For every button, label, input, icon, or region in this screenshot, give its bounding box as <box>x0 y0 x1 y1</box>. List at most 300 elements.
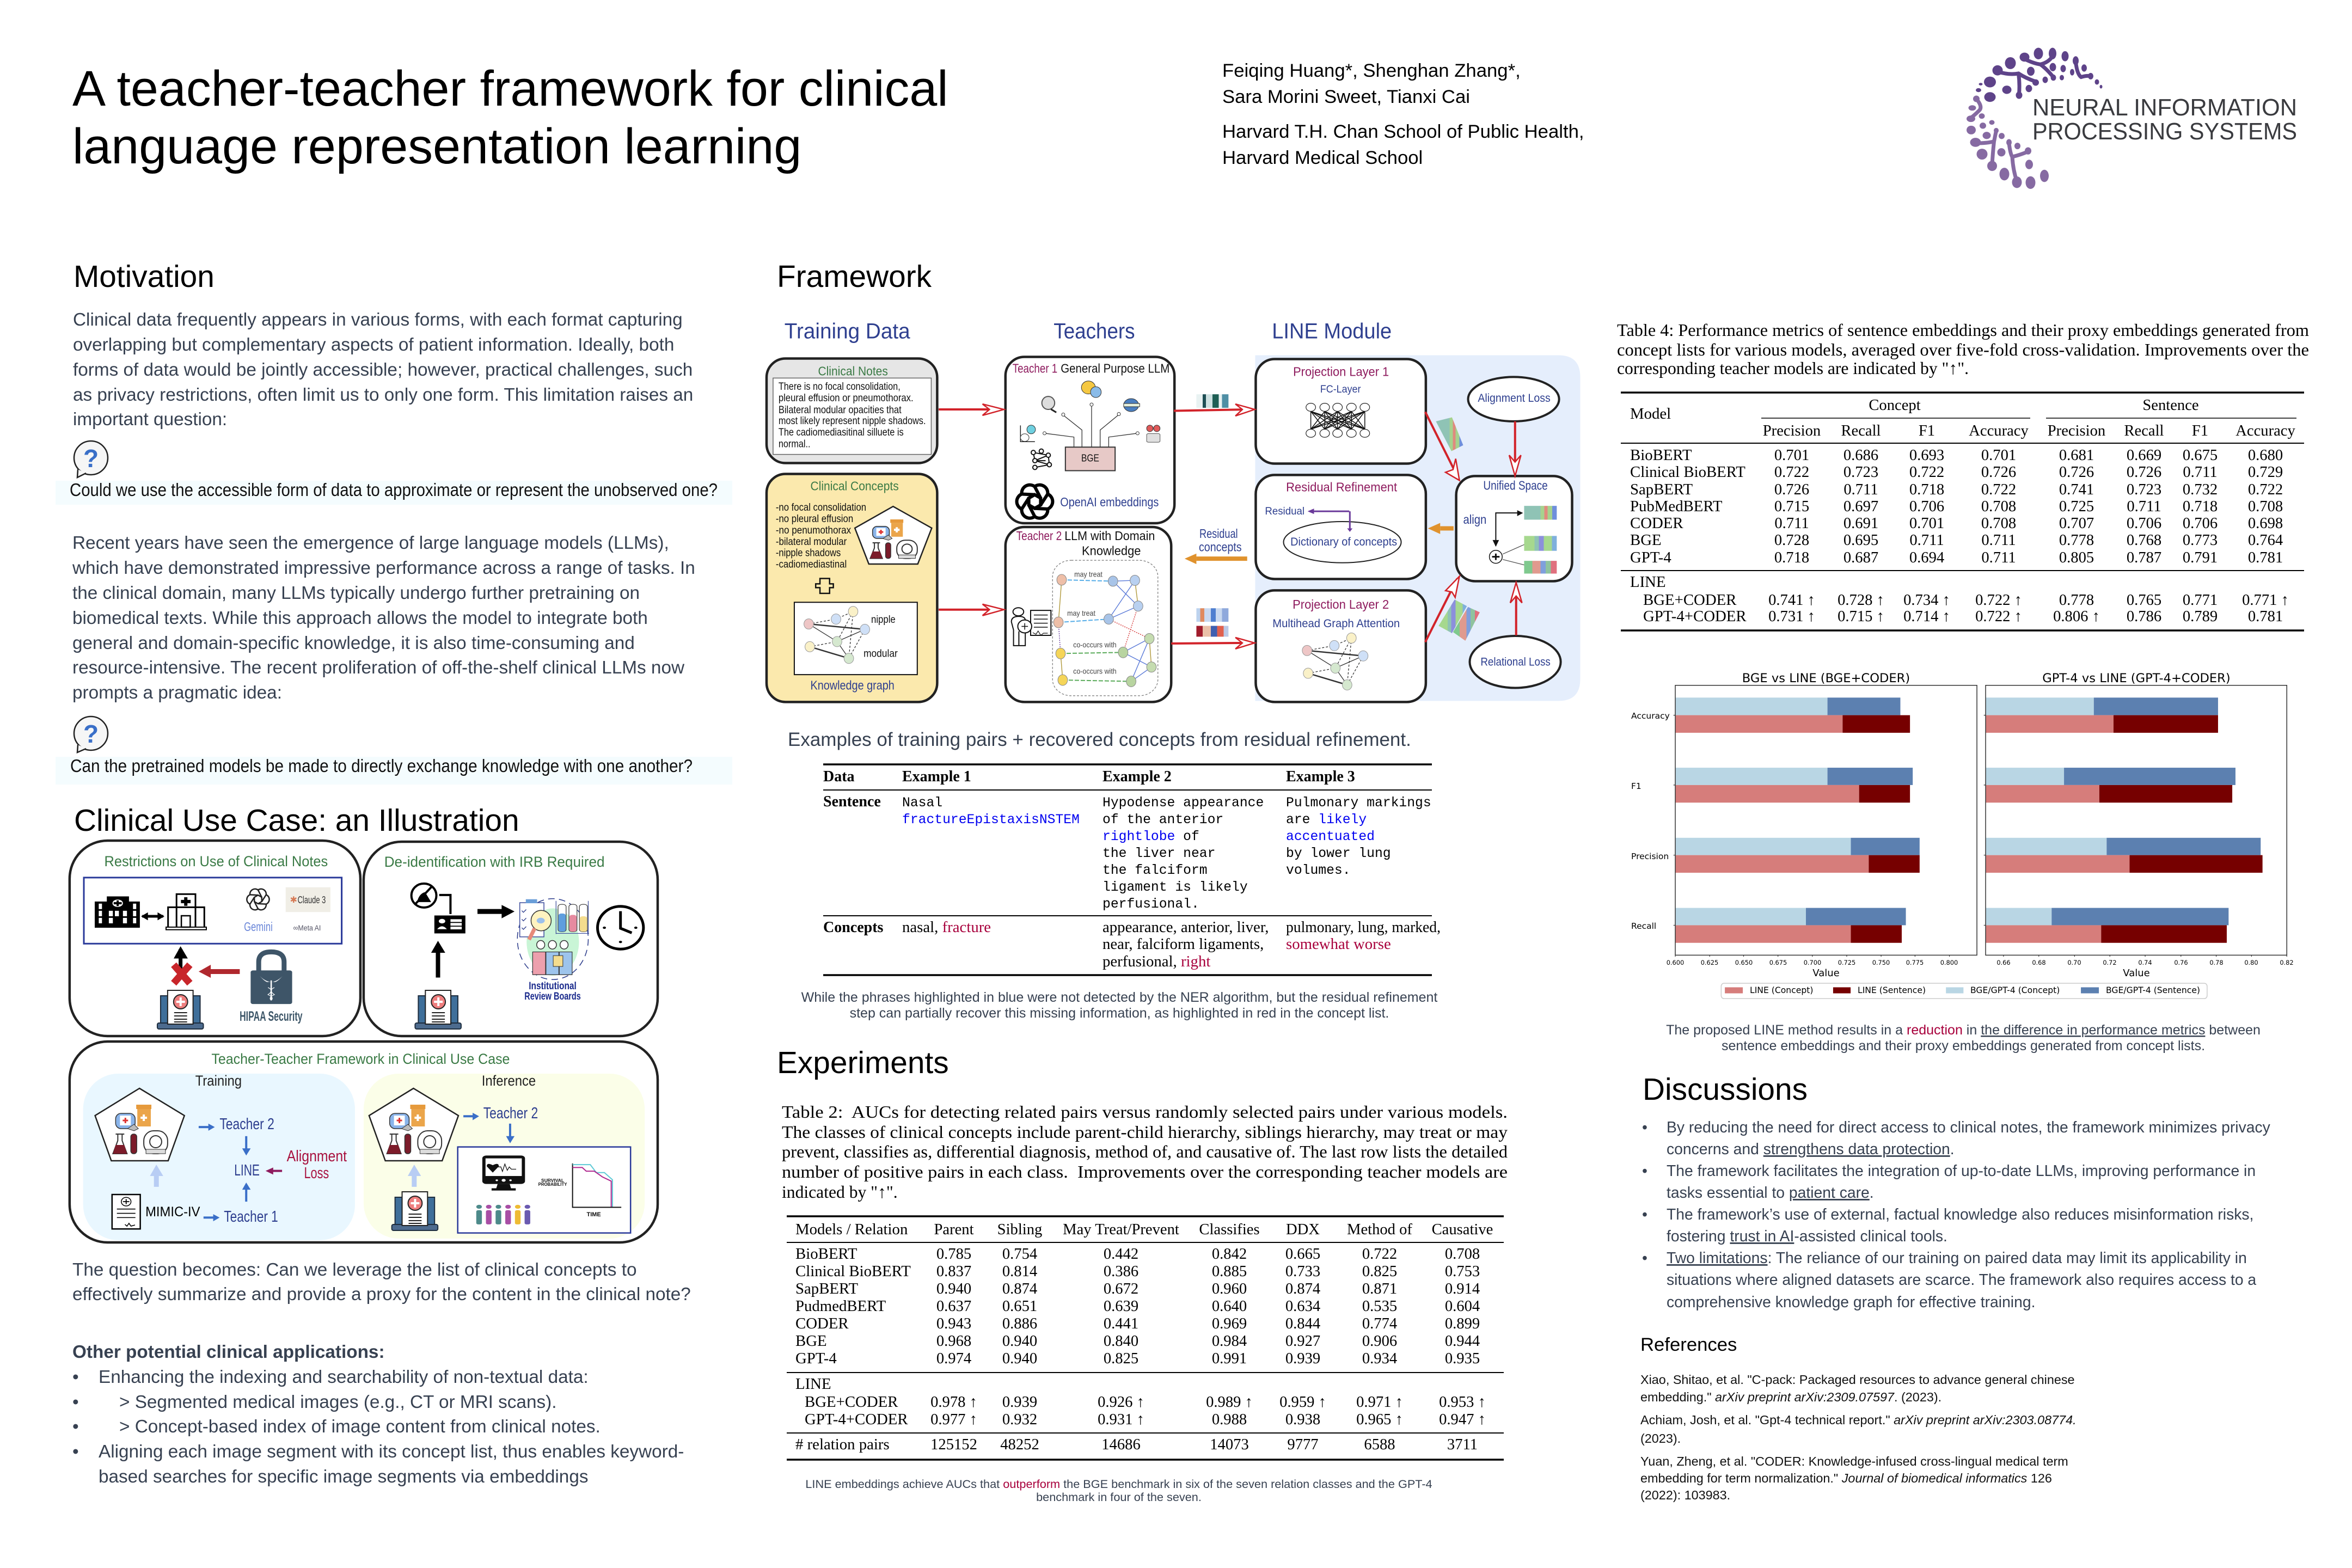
table: performance metrics: Model <box>1630 405 1671 422</box>
panel: projection layer 1: FC-Layer <box>1320 383 1361 395</box>
table: AUCs by relation: 0.825 <box>1104 1350 1138 1367</box>
row: concepts <box>823 918 1441 970</box>
panel: clinical notes: The cadiomediasitinal silluete is <box>779 426 904 438</box>
icon: question bubble 1 <box>74 441 108 477</box>
panel: teacher 2: LLM with Domain <box>1064 529 1155 543</box>
table: performance metrics: BGE+CODER <box>1643 591 1737 609</box>
title <box>72 61 948 174</box>
text block: references: Achiam, Josh, et al. "Gpt-4 technical report." arXiv preprint arXiv:2303.08774. <box>1640 1413 2077 1427</box>
panel: de-identification with IRB: De-identification with IRB Required <box>384 854 605 870</box>
table: performance metrics: F1 <box>1919 422 1935 439</box>
callout: second question <box>56 756 732 785</box>
text block: question becomes: effectively summarize and provide a proxy for the content in the clinical note? <box>72 1284 691 1304</box>
bar chart: GPT-4 vs LINE: 0.80 <box>2244 959 2258 966</box>
label: residual concepts <box>1199 526 1242 554</box>
row: sentence: ligament is likely <box>1102 880 1248 895</box>
table: performance metrics: 0.708 <box>1981 498 2016 515</box>
table: AUCs by relation: 14686 <box>1101 1436 1141 1453</box>
table: AUCs by relation: 0.871 <box>1362 1281 1397 1297</box>
text block: discussion bullets: comprehensive knowledge graph for effective training. <box>1667 1293 2035 1310</box>
heading: References: References <box>1640 1334 1737 1355</box>
row: concepts: nasal, fracture <box>902 918 991 936</box>
bar chart: GPT-4 vs LINE: 0.66 <box>1996 959 2011 966</box>
panel: clinical notes: Bilateral modular opacities that <box>779 404 902 416</box>
bar chart: BGE vs LINE: Value <box>1812 967 1840 979</box>
caption: chart finding: The proposed LINE method results in a reduction in the difference in performance metrics between <box>1666 1022 2261 1038</box>
text: relational loss: Relational Loss <box>1480 656 1551 669</box>
sub-panel: training <box>83 1073 355 1240</box>
table: AUCs by relation: 0.665 <box>1285 1246 1320 1263</box>
text block: references <box>1640 1373 2077 1502</box>
table: AUCs by relation: 48252 <box>1000 1436 1039 1453</box>
table: AUCs by relation: 0.640 <box>1212 1298 1247 1315</box>
table: performance metrics: 0.731 ↑ <box>1768 608 1815 625</box>
panel: restrictions on clinical notes: HIPAA Security <box>240 1009 303 1024</box>
panel: projection layer 1 <box>1255 359 1426 464</box>
text block: other potential clinical applications <box>72 1342 684 1487</box>
caption: residual refinement note: step can partially recover this missing information, as highlighted in red in the concept list. <box>850 1006 1389 1021</box>
table: AUCs by relation: 0.940 <box>936 1281 971 1297</box>
text block: discussion bullets: • <box>1642 1205 1647 1223</box>
table: performance metrics: Accuracy <box>2235 422 2295 439</box>
table: performance metrics: 0.711 <box>2127 498 2161 515</box>
table: performance metrics: 0.701 <box>1909 515 1944 532</box>
text block: other potential clinical applications: • <box>72 1367 79 1387</box>
heading: Discussions: Discussions <box>1643 1073 1808 1107</box>
table: AUCs by relation: 0.947 ↑ <box>1439 1411 1486 1428</box>
table: AUCs by relation: 125152 <box>930 1436 977 1453</box>
table: performance metrics: 0.695 <box>1843 532 1878 549</box>
table: AUCs by relation: 0.899 <box>1445 1315 1480 1332</box>
table: AUCs by relation: 0.874 <box>1285 1281 1320 1297</box>
panel: teacher-teacher framework in clinical use case: Teacher-Teacher Framework in Clinical Use Case <box>211 1051 510 1067</box>
table: AUCs by relation: 0.634 <box>1285 1298 1320 1315</box>
row: sentence: the falciform <box>1102 863 1208 878</box>
table: performance metrics: 0.681 <box>2059 447 2094 464</box>
panel: teacher 1 <box>1006 357 1174 523</box>
table: AUCs by relation: 0.974 <box>936 1350 971 1367</box>
logo: NeurIPS: PROCESSING SYSTEMS <box>2032 118 2297 145</box>
legend: BGE/GPT-4 (Concept) <box>1970 985 2060 995</box>
panel: restrictions on clinical notes: Gemini <box>244 920 273 934</box>
text block: LLM background: Recent years have seen the emergence of large language models (LLMs), <box>72 533 669 553</box>
bar chart: BGE vs LINE <box>1631 671 1977 979</box>
table: performance metrics: 0.806 ↑ <box>2053 608 2100 625</box>
table: performance metrics: 0.726 <box>2127 464 2161 481</box>
table: AUCs by relation: 0.989 ↑ <box>1206 1394 1253 1411</box>
table: AUCs by relation: Classifies <box>1199 1221 1260 1238</box>
text block: references: embedding for term normalization." Journal of biomedical informatics 126 <box>1640 1471 2052 1485</box>
table: AUCs by relation: Models / Relation <box>795 1221 908 1238</box>
panel: teacher 2: may treat <box>1067 609 1095 617</box>
text block: question becomes: The question becomes: Can we leverage the list of clinical concepts to <box>72 1260 636 1280</box>
table: AUCs by relation: Sibling <box>997 1221 1042 1238</box>
table: performance metrics: Precision <box>1763 422 1821 439</box>
icon: OpenAI logo <box>1017 485 1052 518</box>
text: table 2 caption: number of positive pairs in each class. Improvements over the corresponding teacher models are <box>782 1162 1508 1181</box>
table: AUCs by relation: 0.785 <box>936 1246 971 1263</box>
table: performance metrics: 0.714 ↑ <box>1903 608 1950 625</box>
table: AUCs by relation: 0.931 ↑ <box>1098 1411 1144 1428</box>
table: performance metrics: 0.680 <box>2248 447 2283 464</box>
table: AUCs by relation: 0.639 <box>1104 1298 1138 1315</box>
sub-panel: training: Training <box>195 1073 242 1089</box>
text block: discussion bullets: • <box>1642 1249 1647 1266</box>
legend: LINE (Concept) <box>1750 985 1813 995</box>
bar chart: BGE vs LINE: 0.650 <box>1735 959 1753 966</box>
bar chart: GPT-4 vs LINE: 0.78 <box>2209 959 2224 966</box>
bar chart: GPT-4 vs LINE: 0.72 <box>2103 959 2117 966</box>
text: table 2 caption: prevent, classifies as, differential diagnosis, method of, and causative of. The last row lists the detailed <box>782 1142 1508 1161</box>
row: concepts: pulmonary, lung, marked, <box>1286 918 1441 936</box>
table: AUCs by relation: 6588 <box>1364 1436 1395 1453</box>
text block: motivation intro: overlapping but complementary aspects of patient information. Ideally, both <box>73 335 674 355</box>
table: performance metrics: 0.734 ↑ <box>1903 592 1950 609</box>
text block: other potential clinical applications: Enhancing the indexing and searchability of non-textual data: <box>99 1367 589 1387</box>
table: AUCs by relation: BioBERT <box>795 1245 857 1263</box>
table: AUCs by relation: 0.535 <box>1362 1298 1397 1315</box>
table: performance metrics: 0.791 <box>2183 549 2218 566</box>
title: language representation learning <box>72 119 801 174</box>
panel: de-identification with IRB: Institutional <box>529 981 577 992</box>
table: AUCs by relation: 0.938 <box>1285 1411 1320 1428</box>
panel: clinical notes: Clinical Notes <box>818 364 888 378</box>
text block: other potential clinical applications: • <box>72 1442 79 1462</box>
bar chart: BGE vs LINE: Accuracy <box>1631 711 1670 721</box>
table: AUCs by relation: 0.874 <box>1002 1281 1037 1297</box>
legend <box>1721 983 2207 999</box>
table: AUCs by relation: 0.953 ↑ <box>1439 1394 1486 1411</box>
table: AUCs by relation: 0.927 <box>1285 1333 1320 1350</box>
table: performance metrics: 0.686 <box>1843 447 1878 464</box>
table: performance metrics: 0.726 <box>2059 464 2094 481</box>
text block: LLM background: general and domain-specific knowledge, it is also time-consuming and <box>72 633 635 653</box>
chart: framework diagram: Training Data <box>785 320 910 344</box>
panel: teacher 1: Teacher 1 <box>1013 361 1057 375</box>
table: AUCs by relation: CODER <box>795 1315 849 1332</box>
text block: discussion bullets: By reducing the need for direct access to clinical notes, the framework minimizes privacy <box>1667 1118 2271 1136</box>
text: examples heading: Examples of training pairs + recovered concepts from residual refinement. <box>788 729 1411 750</box>
icon: question bubble 1: ? <box>83 444 99 473</box>
table: performance metrics: Clinical BioBERT <box>1630 463 1745 481</box>
bar chart: BGE vs LINE: BGE vs LINE (BGE+CODER) <box>1742 671 1910 685</box>
table: AUCs by relation: 0.971 ↑ <box>1356 1394 1403 1411</box>
table: AUCs by relation: 0.934 <box>1362 1350 1397 1367</box>
table: performance metrics: BioBERT <box>1630 446 1692 464</box>
sub-panel: inference: Inference <box>482 1073 536 1089</box>
sub-panel: training: Alignment <box>287 1148 347 1165</box>
text: table 4 caption <box>1617 321 2309 378</box>
arrows and embedding strips <box>939 394 1522 649</box>
table: performance metrics: Sentence <box>2142 397 2199 414</box>
table: AUCs by relation: 0.637 <box>936 1298 971 1315</box>
label: residual concepts: Residual <box>1199 526 1238 541</box>
table: performance metrics: 0.711 <box>1774 515 1809 532</box>
panel: LINE module background <box>1255 356 1580 701</box>
authors and affiliations: Feiqing Huang*, Shenghan Zhang*, <box>1222 60 1521 81</box>
panel: residual refinement: Residual Refinement <box>1286 480 1398 494</box>
table: AUCs by relation: 0.914 <box>1445 1281 1480 1297</box>
table: performance metrics: 0.764 <box>2248 532 2283 549</box>
bar chart: BGE vs LINE: 0.775 <box>1906 959 1924 966</box>
table: AUCs by relation <box>787 1216 1504 1460</box>
text block: references: Xiao, Shitao, et al. "C-pack: Packaged resources to advance general chinese <box>1640 1373 2075 1387</box>
table: performance metrics: 0.771 <box>2183 592 2218 609</box>
row: sentence: the liver near <box>1102 846 1215 861</box>
sub-panel: training: LINE <box>234 1162 260 1179</box>
heading: Experiments: Experiments <box>777 1046 949 1080</box>
text block: references: Yuan, Zheng, et al. "CODER: Knowledge-infused cross-lingual medical term <box>1640 1454 2068 1468</box>
table: performance metrics: 0.711 <box>1843 481 1878 498</box>
panel: restrictions on clinical notes: ✱ <box>290 896 297 905</box>
table: performance metrics: Recall <box>1841 422 1881 439</box>
table: AUCs by relation: Clinical BioBERT <box>795 1263 911 1280</box>
table: performance metrics: 0.675 <box>2183 447 2218 464</box>
text block: discussion bullets: The framework’s use of external, factual knowledge also reduces misinformation risks, <box>1667 1205 2253 1223</box>
table: AUCs by relation: GPT-4+CODER <box>805 1411 908 1428</box>
text block: other potential clinical applications: Other potential clinical applications: <box>72 1342 385 1362</box>
table header row: Data <box>823 768 855 785</box>
panel: residual refinement <box>1255 475 1426 579</box>
table: AUCs by relation: 0.991 <box>1212 1350 1247 1367</box>
text: table 2 caption: Table 2: AUCs for detecting related pairs versus randomly selected pairs under various models. <box>782 1102 1508 1122</box>
table: performance metrics <box>1621 393 2304 630</box>
table: performance metrics: 0.728 <box>1774 532 1809 549</box>
row: sentence: rightlobe of <box>1102 829 1199 844</box>
text block: discussion bullets: The framework facilitates the integration of up-to-date LLMs, improving performance in <box>1667 1162 2256 1179</box>
row: sentence: accentuated <box>1286 829 1375 844</box>
bar chart: BGE vs LINE: 0.625 <box>1701 959 1718 966</box>
row: sentence <box>823 793 1431 912</box>
table: AUCs by relation: 0.939 <box>1002 1394 1037 1411</box>
text: table 2 caption: indicated by "↑". <box>782 1183 898 1202</box>
panel: unified space: Unified Space <box>1483 478 1548 492</box>
text block: other potential clinical applications: based searches for specific image segments via embeddings <box>99 1467 588 1487</box>
row: sentence: Hypodense appearance <box>1102 795 1264 811</box>
row: sentence: Sentence <box>823 793 881 810</box>
table: performance metrics: Accuracy <box>1969 422 2029 439</box>
table: AUCs by relation: 0.386 <box>1104 1263 1138 1280</box>
callout: second question: Can the pretrained models be made to directly exchange knowledge with one another? <box>70 756 693 776</box>
panel: clinical concepts: -no focal consolidation <box>776 501 866 513</box>
sub-panel: inference: SURVIVAL <box>541 1178 564 1183</box>
panel: projection layer 1: Projection Layer 1 <box>1293 364 1389 378</box>
bar chart: BGE vs LINE: 0.600 <box>1667 959 1684 966</box>
table: AUCs by relation: Causative <box>1432 1221 1493 1238</box>
table: AUCs by relation: BGE+CODER <box>805 1393 898 1411</box>
table: AUCs by relation: 3711 <box>1447 1436 1478 1453</box>
text block: motivation intro: as privacy restrictions, often limit us to only one form. This limitation raises an <box>73 385 693 405</box>
chart: framework diagram <box>767 320 1580 702</box>
authors and affiliations: Harvard Medical School <box>1222 148 1423 168</box>
panel: clinical notes <box>767 359 937 463</box>
table: AUCs by relation: DDX <box>1286 1221 1320 1238</box>
table: AUCs by relation: 0.965 ↑ <box>1356 1411 1403 1428</box>
table: AUCs by relation: 0.932 <box>1002 1411 1037 1428</box>
table: AUCs by relation: 0.840 <box>1104 1333 1138 1350</box>
table: AUCs by relation: GPT-4 <box>795 1350 837 1367</box>
text: table 2 caption <box>782 1102 1508 1202</box>
panel: unified space <box>1456 476 1572 581</box>
text block: motivation intro: important question: <box>73 409 227 430</box>
row: concepts: Concepts <box>823 919 884 936</box>
legend: BGE/GPT-4 (Sentence) <box>2106 985 2200 995</box>
panel: clinical notes: most likely represent nipple shadows. <box>779 415 926 427</box>
panel: projection layer 2: Projection Layer 2 <box>1293 597 1389 611</box>
icon: OpenAI logo small <box>247 889 270 910</box>
table: AUCs by relation: 14073 <box>1210 1436 1249 1453</box>
panel: teacher 2 <box>1006 527 1171 702</box>
panel: clinical concepts: Clinical Concepts <box>811 479 899 493</box>
panel: teacher 2: may treat <box>1074 569 1102 578</box>
text block: discussion bullets: • <box>1642 1118 1647 1136</box>
table: performance metrics: 0.706 <box>2127 515 2161 532</box>
bar chart: BGE vs LINE: 0.700 <box>1804 959 1821 966</box>
table: performance metrics: 0.773 <box>2183 532 2218 549</box>
text block: discussion bullets: • <box>1642 1162 1647 1179</box>
table: performance metrics: 0.697 <box>1843 498 1878 515</box>
bar chart: GPT-4 vs LINE <box>1984 671 2294 979</box>
text block: other potential clinical applications: > Concept-based index of image content from clinical notes. <box>119 1417 601 1437</box>
row: sentence: Nasal <box>902 795 942 811</box>
bar chart: BGE vs LINE: Recall <box>1631 921 1656 931</box>
table: AUCs by relation: 0.733 <box>1285 1263 1320 1280</box>
text: table 2 caption: The classes of clinical concepts include parent-child hierarchy, siblings hierarchy, may treat or may <box>782 1123 1508 1142</box>
table: AUCs by relation: 0.753 <box>1445 1263 1480 1280</box>
text block: LLM background <box>72 533 695 703</box>
table: performance metrics: 0.708 <box>2248 498 2283 515</box>
title: A teacher-teacher framework for clinical <box>72 61 948 117</box>
panel: residual refinement: Dictionary of concepts <box>1290 536 1397 548</box>
caption: AUC finding <box>805 1477 1432 1504</box>
table: performance metrics: 0.711 <box>2183 464 2218 481</box>
table: performance metrics: 0.691 <box>1843 515 1878 532</box>
panel: restrictions on clinical notes: ∞Meta AI <box>293 923 321 932</box>
table: AUCs by relation: 0.906 <box>1362 1333 1397 1350</box>
text: relational loss <box>1469 636 1561 688</box>
table: performance metrics: 0.711 <box>1909 532 1944 549</box>
table: performance metrics: 0.771 ↑ <box>2242 592 2289 609</box>
table: performance metrics: 0.787 <box>2127 549 2161 566</box>
icon: question bubble 2 <box>74 716 108 752</box>
heading: Motivation: Motivation <box>74 260 215 294</box>
caption: chart finding <box>1666 1022 2261 1054</box>
sub-panel: training: Loss <box>304 1165 329 1182</box>
table: AUCs by relation: 0.988 <box>1212 1411 1247 1428</box>
authors and affiliations: Sara Morini Sweet, Tianxi Cai <box>1222 87 1470 107</box>
sub-panel: training: Teacher 2 <box>219 1116 274 1133</box>
text block: references: (2022): 103983. <box>1640 1488 1730 1502</box>
table: AUCs by relation: SapBERT <box>795 1280 858 1297</box>
table: AUCs by relation: 0.944 <box>1445 1333 1480 1350</box>
panel: clinical notes: normal.. <box>779 438 811 450</box>
text block: question becomes <box>72 1260 691 1304</box>
authors and affiliations <box>1222 60 1584 168</box>
sub-panel: inference: PROBABILITY <box>538 1181 567 1187</box>
table: AUCs by relation: 0.672 <box>1104 1281 1138 1297</box>
heading: Clinical Use Case: Clinical Use Case: an Illustration <box>74 804 519 838</box>
table: performance metrics: GPT-4 <box>1630 549 1671 566</box>
table: performance metrics: 0.728 ↑ <box>1837 592 1884 609</box>
panel: teacher 2: Teacher 2 <box>1016 529 1062 543</box>
panel: clinical concepts: -bilateral modular <box>776 536 847 548</box>
bar chart: BGE vs LINE: F1 <box>1631 781 1641 791</box>
table: performance metrics: 0.698 <box>2248 515 2283 532</box>
table: AUCs by relation: Parent <box>934 1221 974 1238</box>
table: examples of training pairs <box>823 764 1441 975</box>
table: performance metrics: Precision <box>2048 422 2105 439</box>
table: AUCs by relation: 9777 <box>1287 1436 1319 1453</box>
table: performance metrics: 0.707 <box>2059 515 2094 532</box>
table: performance metrics: 0.778 <box>2059 532 2094 549</box>
table: performance metrics: 0.725 <box>2059 498 2094 515</box>
text block: motivation intro: Clinical data frequently appears in various forms, with each format capturing <box>73 310 683 330</box>
table: AUCs by relation: 0.441 <box>1104 1315 1138 1332</box>
table: AUCs by relation: 0.825 <box>1362 1263 1397 1280</box>
table: performance metrics: 0.693 <box>1909 447 1944 464</box>
table: performance metrics: 0.711 <box>1981 549 2016 566</box>
text block: discussion bullets: fostering trust in AI-assisted clinical tools. <box>1667 1227 1947 1245</box>
table: performance metrics: 0.741 <box>2059 481 2094 498</box>
table: performance metrics: 0.768 <box>2127 532 2161 549</box>
panel: projection layer 2 <box>1255 590 1426 702</box>
panel: clinical concepts: modular <box>863 648 898 660</box>
text block: other potential clinical applications: • <box>72 1392 79 1412</box>
text block: LLM background: prompts a pragmatic idea: <box>72 683 282 703</box>
text block: LLM background: resource-intensive. The recent proliferation of off-the-shelf clinical LLMs now <box>72 658 685 678</box>
bar chart: GPT-4 vs LINE: GPT-4 vs LINE (GPT-4+CODER) <box>2042 671 2231 685</box>
text: table 4 caption: corresponding teacher models are indicated by "↑". <box>1617 359 1969 378</box>
text: table 4 caption: concept lists for various models, averaged over five-fold cross-validation. Improvements over the <box>1617 340 2309 359</box>
table: performance metrics: GPT-4+CODER <box>1643 608 1747 625</box>
table header row: Example 3 <box>1286 768 1355 785</box>
bar chart: BGE vs LINE: Precision <box>1631 852 1669 861</box>
table: performance metrics: 0.789 <box>2183 608 2218 625</box>
table: AUCs by relation: Method of <box>1347 1221 1412 1238</box>
panel: teacher 1: OpenAI embeddings <box>1060 495 1159 509</box>
row: sentence: are likely <box>1286 812 1367 828</box>
panel: de-identification with IRB: Review Boards <box>524 991 581 1002</box>
table: performance metrics: 0.805 <box>2059 549 2094 566</box>
panel: teacher 2: Knowledge <box>1082 544 1141 558</box>
bar chart: GPT-4 vs LINE: 0.82 <box>2280 959 2294 966</box>
panel: clinical concepts: nipple <box>871 614 896 626</box>
table: performance metrics: 0.701 <box>1981 447 2016 464</box>
caption: residual refinement note <box>801 990 1437 1021</box>
text: alignment loss: Alignment Loss <box>1478 392 1551 405</box>
panel: teacher 2: co-occurs with <box>1073 640 1117 649</box>
chart: framework diagram: Teachers <box>1054 320 1135 344</box>
table: performance metrics: 0.722 <box>2248 481 2283 498</box>
authors and affiliations: Harvard T.H. Chan School of Public Health, <box>1222 121 1584 142</box>
table: performance metrics: 0.706 <box>1909 498 1944 515</box>
table: performance metrics: 0.718 <box>1774 549 1809 566</box>
sub-panel: inference <box>364 1073 645 1239</box>
table: AUCs by relation: 0.978 ↑ <box>930 1394 977 1411</box>
row: sentence: perfusional. <box>1102 897 1199 912</box>
table: AUCs by relation: 0.959 ↑ <box>1279 1394 1326 1411</box>
panel: clinical concepts: Knowledge graph <box>811 678 895 692</box>
text block: discussion bullets <box>1642 1118 2271 1310</box>
table: performance metrics: 0.722 ↑ <box>1975 592 2022 609</box>
text block: discussion bullets: situations where aligned datasets are scarce. The framework also requires access to a <box>1667 1271 2256 1288</box>
text: table 4 caption: Table 4: Performance metrics of sentence embeddings and their proxy embeddings generated from <box>1617 321 2309 340</box>
panel: restrictions on clinical notes: Restrictions on Use of Clinical Notes <box>105 853 328 869</box>
heading: Framework: Framework <box>777 260 932 294</box>
table: AUCs by relation: BGE <box>795 1332 827 1350</box>
text block: discussion bullets: Two limitations: The reliance of our training on paired data may limit its applicability in <box>1667 1249 2247 1266</box>
table: performance metrics: 0.722 <box>1981 481 2016 498</box>
